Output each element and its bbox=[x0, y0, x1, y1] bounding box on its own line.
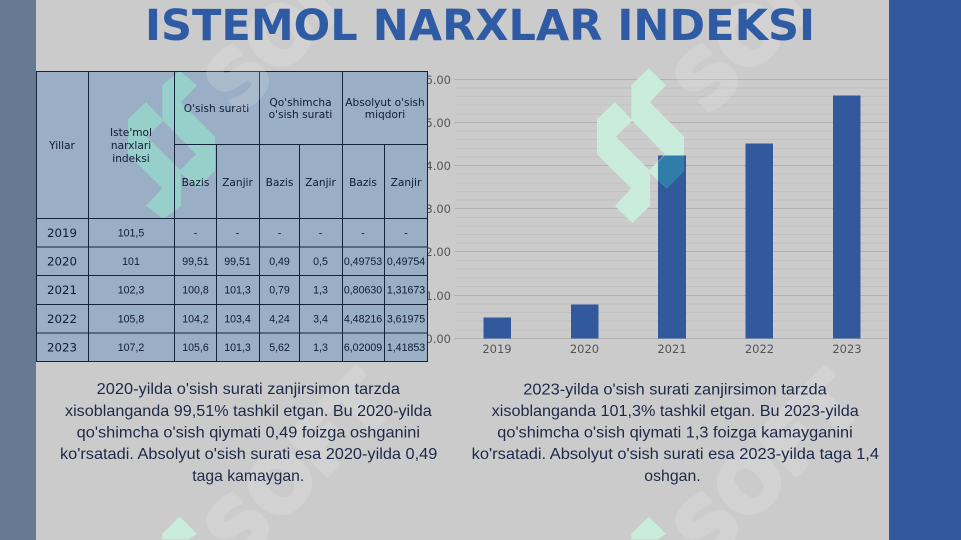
row 2019: - bbox=[278, 228, 282, 240]
table header: o'sish surati bbox=[269, 109, 332, 121]
row 2023: 5,62 bbox=[269, 342, 290, 354]
y axis labels bbox=[425, 73, 451, 346]
row 2019: - bbox=[361, 228, 365, 240]
row 2019: - bbox=[236, 228, 240, 240]
left side band bbox=[0, 0, 36, 540]
table header: Bazis bbox=[182, 177, 209, 189]
table header bbox=[48, 97, 425, 189]
row 2023: 1,41853 bbox=[387, 342, 425, 354]
y axis labels: 6.00 bbox=[425, 73, 451, 87]
logo overlap on 2021 bar bbox=[658, 156, 684, 188]
left commentary text: xisoblanganda 99,51% tashkil etgan. Bu 2020-yilda bbox=[65, 403, 432, 420]
right side band bbox=[889, 0, 961, 540]
data table bbox=[36, 71, 428, 362]
left commentary text: taga kamaygan. bbox=[192, 468, 304, 485]
table header: Bazis bbox=[349, 177, 377, 189]
y axis labels: 1.00 bbox=[425, 289, 451, 303]
y axis labels: 0.00 bbox=[425, 332, 451, 346]
right commentary text: oshgan. bbox=[644, 468, 701, 485]
watermark logo over chart bbox=[597, 68, 684, 223]
row 2023: 6,02009 bbox=[344, 342, 382, 354]
major grid lines bbox=[454, 80, 888, 338]
table header: miqdori bbox=[365, 109, 405, 121]
y axis labels: 5.00 bbox=[425, 116, 451, 130]
row 2019: - bbox=[194, 228, 198, 240]
row 2019: - bbox=[319, 228, 323, 240]
row 2022: 2022 bbox=[47, 312, 77, 326]
row 2022: 104,2 bbox=[182, 314, 209, 326]
row 2023 bbox=[47, 340, 425, 354]
row 2023: 2023 bbox=[47, 340, 77, 354]
table header: Zanjir bbox=[305, 177, 336, 189]
row 2021 bbox=[47, 283, 425, 297]
row 2020: 0,49 bbox=[269, 256, 290, 268]
row 2020: 0,5 bbox=[313, 256, 328, 268]
table header: O'sish surati bbox=[184, 103, 249, 115]
row 2019: 2019 bbox=[47, 226, 77, 240]
table header: Qo'shimcha bbox=[269, 97, 332, 109]
row 2022: 4,48216 bbox=[344, 314, 382, 326]
right commentary text: qo'shimcha o'sish qiymati 1,3 foizga kamayganini bbox=[497, 424, 853, 442]
row 2022: 3,61975 bbox=[387, 314, 425, 326]
row 2023: 1,3 bbox=[313, 342, 328, 354]
row 2019 bbox=[47, 226, 408, 240]
row 2021: 102,3 bbox=[118, 284, 144, 296]
right commentary text: xisoblanganda 101,3% tashkil etgan. Bu 2023-yilda bbox=[492, 403, 859, 420]
row 2020: 0,49753 bbox=[344, 256, 382, 268]
row 2023: 105,6 bbox=[182, 342, 209, 354]
left commentary text: ko'rsatadi. Absolyut o'sish surati esa 2020-yilda 0,49 bbox=[60, 446, 437, 463]
table header: Iste'mol bbox=[110, 127, 152, 139]
left commentary text bbox=[60, 381, 437, 485]
right commentary text bbox=[472, 382, 879, 485]
watermark logo bottom right bbox=[631, 517, 666, 539]
row 2020: 2020 bbox=[47, 254, 77, 268]
row 2022 bbox=[47, 312, 425, 326]
table header: Absolyut o'sish bbox=[345, 97, 425, 109]
table background bbox=[36, 71, 428, 362]
row 2020 bbox=[47, 254, 425, 268]
x axis labels: 2019 bbox=[482, 342, 512, 356]
y axis labels: 2.00 bbox=[425, 245, 451, 259]
x axis labels: 2021 bbox=[657, 342, 687, 356]
row 2023: 101,3 bbox=[224, 342, 251, 354]
right commentary text: 2023-yilda o'sish surati zanjirsimon tarzda bbox=[523, 382, 827, 398]
left commentary text: 2020-yilda o'sish surati zanjirsimon tarzda bbox=[97, 381, 400, 398]
row 2020: 99,51 bbox=[182, 256, 209, 268]
row 2023: 107,2 bbox=[118, 342, 144, 354]
table header: Zanjir bbox=[222, 177, 253, 189]
table grid bbox=[36, 71, 428, 362]
watermark logo bottom left bbox=[162, 517, 197, 539]
row 2019: - bbox=[404, 228, 408, 240]
row 2022: 105,8 bbox=[118, 314, 144, 326]
bar chart bbox=[425, 73, 888, 356]
row 2019: 101,5 bbox=[118, 228, 144, 240]
x axis labels bbox=[482, 342, 862, 356]
row 2021: 100,8 bbox=[182, 284, 209, 296]
row 2021: 0,79 bbox=[269, 284, 290, 296]
right commentary text: ko'rsatadi. Absolyut o'sish surati esa 2023-yilda taga 1,4 bbox=[472, 446, 879, 463]
row 2021: 101,3 bbox=[224, 284, 251, 296]
x axis labels: 2022 bbox=[745, 342, 774, 356]
row 2021: 1,3 bbox=[313, 284, 328, 296]
row 2020: 0,49754 bbox=[387, 256, 425, 268]
table header: indeksi bbox=[112, 153, 150, 165]
row 2022: 103,4 bbox=[224, 314, 251, 326]
row 2020: 101 bbox=[122, 256, 140, 268]
x axis labels: 2023 bbox=[832, 342, 862, 356]
left commentary text: qo'shimcha o'sish qiymati 0,49 foizga oshganini bbox=[77, 424, 420, 442]
watermark logo over table bbox=[128, 71, 215, 219]
row 2021: 1,31673 bbox=[387, 284, 425, 296]
row 2022: 4,24 bbox=[269, 314, 290, 326]
row 2022: 3,4 bbox=[313, 314, 328, 326]
x axis labels: 2020 bbox=[570, 342, 599, 356]
watermark text bbox=[206, 71, 738, 112]
row 2021: 0,80630 bbox=[344, 284, 382, 296]
table header: Zanjir bbox=[391, 177, 422, 189]
table header: narxlari bbox=[111, 140, 151, 152]
y axis labels: 4.00 bbox=[425, 159, 451, 173]
row 2021: 2021 bbox=[47, 283, 77, 297]
title: ISTEMOL NARXLAR INDEKSI bbox=[145, 1, 815, 51]
y axis labels: 3.00 bbox=[425, 202, 451, 216]
bars bbox=[484, 96, 860, 338]
row 2020: 99,51 bbox=[224, 256, 251, 268]
table header: Bazis bbox=[266, 177, 293, 189]
table header: Yillar bbox=[48, 140, 76, 152]
minor grid lines bbox=[456, 88, 888, 330]
